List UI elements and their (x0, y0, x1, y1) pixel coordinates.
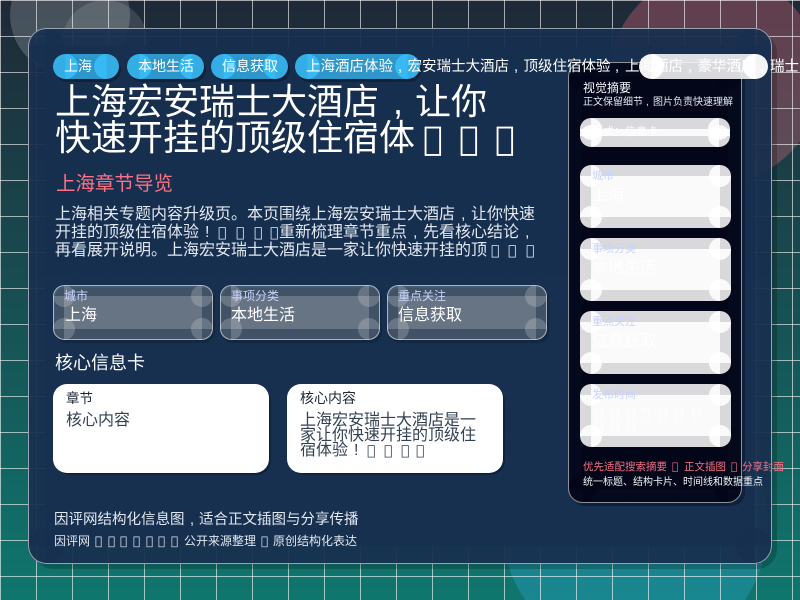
info card: core content (287, 384, 505, 475)
meta card: category: 本地生活 (231, 306, 295, 324)
summary subheading: 正文保留细节 (583, 97, 643, 108)
title:  (423, 119, 515, 158)
meta card: category: 事项分类 (231, 289, 279, 303)
intro text:  (491, 243, 534, 259)
meta card: city (53, 285, 215, 343)
tag pills row: 宏安瑞士大酒店 (408, 58, 509, 75)
section lead: 上海章节导览 (56, 173, 173, 195)
intro text: 上海相关专题内容升级页。本页围绕上海宏安瑞士大酒店 (55, 206, 455, 223)
footer source:  (261, 534, 268, 548)
summary card: city (580, 165, 731, 228)
summary card: layout: 版式：信息卡 (592, 124, 658, 138)
summary card: category (580, 238, 731, 301)
title: , (393, 81, 403, 122)
tag pills row: 上海 (64, 58, 92, 74)
footer line: , (190, 512, 194, 528)
info card: core content: ! (354, 442, 358, 459)
tag pills row: , (514, 59, 518, 75)
intro text (55, 205, 535, 259)
meta card: focus (387, 285, 549, 343)
summary card: publish time: 发布时间 (592, 387, 636, 401)
summary card: focus: 信息获取 (592, 332, 656, 350)
info card: core content:  (367, 443, 424, 459)
summary card: category: 事项分类 (592, 241, 636, 255)
meta card: focus: 信息获取 (398, 306, 462, 324)
summary card: publish time:  (595, 420, 635, 436)
tag pills row: 瑞士 (770, 58, 799, 75)
summary note red:  (672, 461, 678, 473)
title: 让你 (415, 81, 487, 122)
info card: core content: 核心内容 (300, 390, 356, 406)
intro text: 开挂的顶级住宿体验 (55, 224, 199, 241)
summary card: city: 城市 (592, 168, 614, 182)
intro text: , (525, 224, 529, 241)
tag pills row: 本地生活 (138, 58, 194, 74)
summary note red:  (731, 461, 737, 473)
summary subheading: , (646, 97, 649, 108)
intro text: , (413, 224, 417, 241)
intro text: 先看核心结论 (423, 223, 519, 241)
tag pills row: , (688, 59, 692, 75)
intro text: 再看展开说明。上海宏安瑞士大酒店是一家让你快速开挂的顶 (55, 242, 487, 259)
info card: chapter (53, 384, 271, 475)
intro text:  (218, 225, 278, 241)
title: 上海宏安瑞士大酒店 (55, 81, 379, 122)
summary card: publish time (580, 384, 731, 447)
tag pills row: , (760, 59, 764, 75)
summary note red: 正文插图 (684, 460, 726, 473)
tag pills row: 上海酒店体验 (306, 59, 393, 75)
summary card: city: 上海 (592, 186, 624, 204)
info card: core content: 家让你快速开挂的顶级住 (300, 426, 476, 444)
summary card: focus: 重点关注 (592, 314, 636, 328)
info card: core content: 上海宏安瑞士大酒店是一 (300, 411, 476, 429)
intro text: ! (205, 224, 209, 241)
footer source: 公开来源整理 (184, 533, 256, 548)
summary card: layout (580, 118, 730, 147)
summary note red: 分享封面 (742, 460, 784, 473)
title: 快速开挂的顶级住宿体 (55, 117, 415, 158)
tag pills row: 信息获取 (222, 58, 278, 74)
right summary panel (568, 62, 784, 506)
summary note white: 统一标题、结构卡片、时间线和数据重点 (583, 475, 763, 488)
meta card: city: 城市 (64, 288, 88, 303)
summary card: publish time:  (595, 406, 700, 422)
meta card: category (220, 285, 382, 343)
intro text: 重新梳理章节重点 (279, 223, 407, 241)
info card: chapter: 章节 (66, 390, 93, 406)
tag pills row: 豪华酒店 (698, 58, 756, 75)
tag pills row: , (615, 59, 619, 75)
summary subheading: 图片负责快速理解 (653, 95, 733, 108)
meta card: city: 上海 (65, 306, 97, 324)
footer source: 原创结构化表达 (273, 533, 357, 548)
section heading: 核心信息卡 (55, 353, 145, 373)
footer source: 因评网 (54, 534, 90, 548)
info card: chapter: 核心内容 (66, 411, 130, 429)
tag pills row: , (398, 59, 402, 75)
footer line: 因评网结构化信息图 (54, 512, 184, 528)
tag pills row: 顶级住宿体验 (524, 58, 611, 75)
summary heading: 视觉摘要 (583, 80, 631, 95)
summary card: focus (580, 311, 731, 374)
summary note red: 优先适配搜索摘要 (583, 461, 667, 473)
meta card: focus: 重点关注 (398, 288, 446, 303)
footer source:  (95, 534, 178, 548)
footer line: 适合正文插图与分享传播 (199, 511, 359, 528)
tag pills row: 上海酒店 (625, 58, 683, 75)
intro text: 让你快速 (471, 205, 535, 223)
summary card: category: 本地生活 (592, 259, 656, 277)
tag pills row (53, 54, 799, 82)
info card: core content: 宿体验 (300, 442, 348, 459)
title (55, 81, 515, 158)
white pill (639, 54, 768, 79)
intro text: , (461, 206, 465, 223)
